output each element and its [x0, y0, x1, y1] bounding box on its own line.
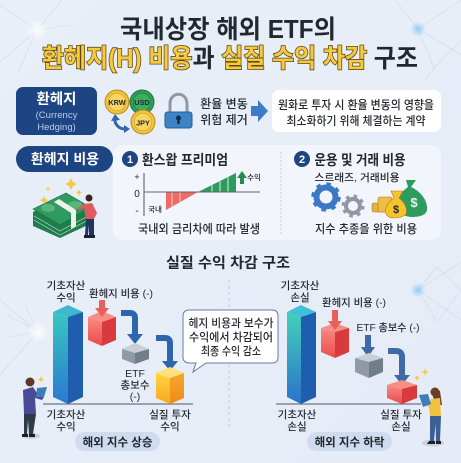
text: 기초자산 수익 bottom: 수익 — [56, 421, 76, 433]
callout: 헤지 비용과 보수 — [183, 310, 278, 372]
chart: swap premium: 0 — [134, 189, 140, 200]
chart: swap premium: 국내 — [148, 204, 162, 214]
text: 기초자산 손실 bottom — [278, 409, 317, 433]
text: 기초자산 손실 top: 손실 — [290, 292, 310, 304]
icon: currency coins — [105, 90, 155, 134]
text: 지수 추종을 위한 비용: 지수 추종을 위한 비용 — [315, 222, 417, 236]
text: 환헤지 비용: 환헤지 비용 (-) — [322, 296, 386, 309]
arrow: blue down — [361, 335, 375, 357]
text: 실질 투자 수익: 수익 — [160, 421, 180, 433]
heading: 실질 수익 차감 구조: 실질 수익 차감 구조 — [166, 255, 290, 272]
callout: definition: 원화로 투자 시 환율 변동의 영향을 — [278, 98, 434, 112]
bar: 기초자산 수익 — [53, 305, 83, 404]
icon: woman with tablet — [414, 368, 444, 446]
cube: red hedging cost — [321, 323, 349, 358]
arrow: blue bent 1 — [121, 313, 143, 344]
heading: 2 운용 및 거래 비용 — [294, 151, 406, 184]
heading: 2 운용 및 거래 비용: 스르래즈, 거래비용 — [314, 172, 400, 184]
icon: coins and money bags: $ — [393, 204, 399, 216]
pill: 해외 지수 하락: 해외 지수 하락 — [315, 436, 385, 449]
text: 기초자산 수익 bottom — [47, 409, 86, 433]
arrow: blue bent 2 — [156, 338, 178, 371]
pill: 해외 지수 상승 — [75, 432, 160, 451]
text: ETF 총보수: 총보수 — [121, 380, 150, 392]
bar: 기초자산 손실 — [287, 305, 316, 404]
baseline — [43, 403, 193, 405]
callout: 헤지 비용과 보수: 수익에서 차감되어 — [189, 331, 273, 344]
pill: 해외 지수 하락 — [307, 432, 392, 451]
text: 환율 변동 위험 제거: 환율 변동 — [200, 97, 248, 111]
pill: 해외 지수 상승: 해외 지수 상승 — [83, 436, 153, 449]
callout: definition — [272, 90, 441, 132]
icon: currency coins: USD — [134, 98, 150, 107]
label: 환헤지 (Currency Hedging) — [16, 87, 97, 135]
panel: 환헤지 비용 — [16, 145, 441, 240]
text: ETF 총보수: (-) — [130, 391, 140, 403]
text: 기초자산 손실 bottom: 손실 — [287, 421, 307, 433]
heading: 2 운용 및 거래 비용: 2 — [299, 154, 305, 166]
text: 기초자산 수익 bottom: 기초자산 — [47, 409, 86, 421]
callout: definition: 최소화하기 위해 체결하는 계약 — [286, 114, 426, 128]
label: 환헤지 (Currency Hedging): Hedging) — [37, 122, 76, 133]
heading: 1 환스왑 프리미엄: 환스왑 프리미엄 — [142, 152, 228, 168]
chart: swap premium: - — [135, 206, 139, 217]
cube: grey ETF fee — [355, 353, 383, 378]
panel: 해외 지수 상승 — [22, 280, 193, 451]
text: 기초자산 수익 top: 기초자산 — [47, 280, 86, 292]
title — [42, 16, 418, 73]
title: 국내상장 해외 ETF의 — [120, 16, 336, 44]
text: ETF 총보수: ETF 총보수 (-) — [356, 322, 420, 334]
chart: swap premium: 수익 — [247, 172, 261, 182]
cube: red hedging cost — [88, 311, 116, 346]
text: 환율 변동 위험 제거: 위험 제거 — [200, 112, 248, 127]
text: 실질 투자 손실 — [380, 409, 422, 433]
icon: coins and money bags: $ — [410, 195, 418, 210]
text: 실질 투자 손실: 손실 — [391, 421, 411, 433]
baseline — [276, 403, 421, 405]
icon: padlock — [165, 94, 192, 128]
text: 실질 투자 수익 — [149, 409, 191, 433]
text: 환율 변동 위험 제거 — [200, 97, 248, 127]
label: 환헤지 (Currency Hedging): (Currency — [36, 110, 78, 121]
heading: 2 운용 및 거래 비용: 운용 및 거래 비용 — [314, 152, 406, 168]
text: 실질 투자 수익: 실질 투자 — [149, 409, 191, 421]
label: 환헤지 (Currency Hedging): 환헤지 — [36, 91, 77, 108]
label pill: 환헤지 비용 — [16, 146, 113, 172]
panel: 해외 지수 하락 — [276, 280, 444, 451]
icon: man with tablet — [22, 376, 47, 439]
text: 기초자산 손실 bottom: 기초자산 — [278, 409, 317, 421]
cube: red net loss — [387, 380, 417, 404]
icon: coins and money bags — [372, 180, 427, 218]
chart: swap premium — [134, 171, 261, 236]
text: 기초자산 손실 top: 기초자산 — [281, 280, 320, 292]
icon: currency coins: JPY — [136, 118, 150, 128]
icon: money stack and person — [33, 178, 97, 238]
heading: 1 환스왑 프리미엄: 1 — [127, 154, 133, 166]
text: 실질 투자 손실: 실질 투자 — [380, 409, 422, 421]
cube: grey ETF fee — [122, 343, 149, 364]
icon: currency coins: KRW — [108, 98, 126, 107]
arrow: blue bent — [388, 351, 410, 385]
text: 기초자산 손실 top — [281, 280, 320, 304]
title: 환헤지(H) 비용과 실질 수익 차감 구조 — [42, 45, 418, 73]
arrow: red down — [95, 300, 109, 317]
arrow: to definition — [251, 100, 268, 122]
callout: 헤지 비용과 보수: 최종 수익 감소 — [201, 344, 261, 358]
arrow: red down — [328, 310, 342, 330]
label pill: 환헤지 비용: 환헤지 비용 — [31, 151, 99, 167]
text: 기초자산 수익 top: 수익 — [56, 292, 76, 304]
text: ETF 총보수: ETF — [125, 368, 145, 380]
chart: swap premium: + — [134, 172, 140, 182]
text: 환헤지 비용: 환헤지 비용 (-) — [89, 287, 153, 300]
cube: yellow net return — [156, 367, 184, 404]
text: 기초자산 수익 top — [47, 280, 86, 304]
text: ETF 총보수 — [121, 368, 150, 403]
icon: gears — [313, 184, 363, 216]
chart: swap premium: 국내외 금리차에 따라 발생 — [138, 222, 260, 236]
panel: 환헤지 definition — [16, 87, 441, 135]
callout: 헤지 비용과 보수: 헤지 비용과 보수가 — [188, 317, 274, 330]
